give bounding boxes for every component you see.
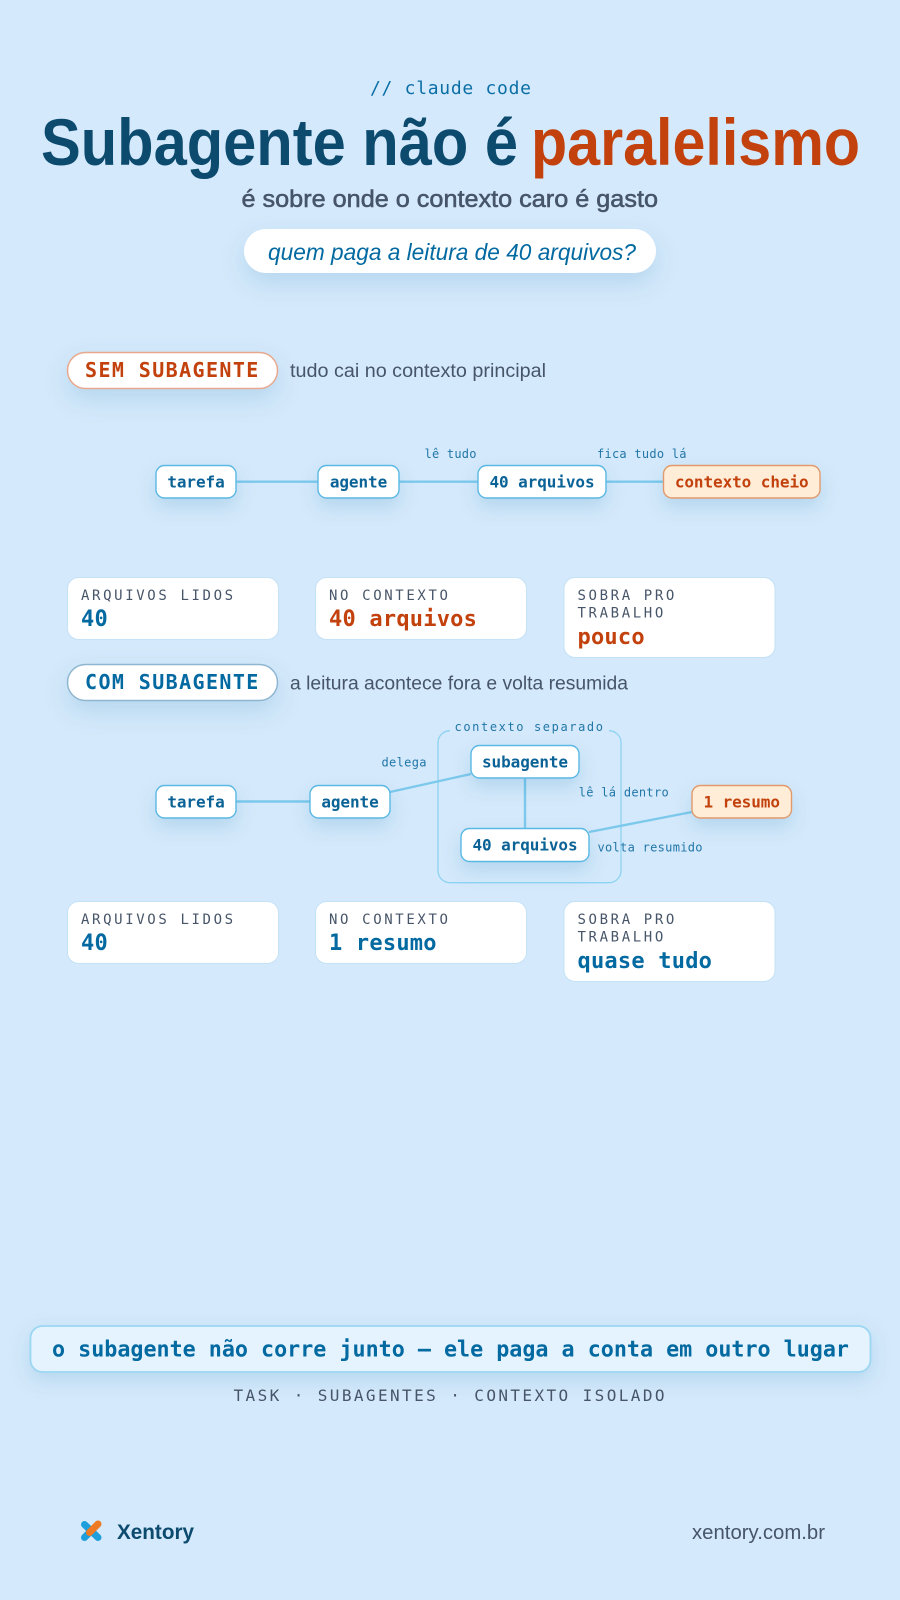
stat: sobra pro trabalho: pouco <box>578 625 645 650</box>
edge label: lê lá dentro: lê lá dentro <box>579 786 669 800</box>
diagram: sem subagente <box>156 447 820 498</box>
node: 40 arquivos: 40 arquivos <box>489 472 595 492</box>
eyebrow: // claude code <box>370 78 531 99</box>
stat: sobra pro trabalho: quase tudo <box>578 949 712 974</box>
footer logo <box>84 1521 194 1544</box>
node: agente: agente <box>321 792 379 812</box>
section tag: sem subagente <box>68 352 278 388</box>
node: contexto cheio: contexto cheio <box>675 472 809 492</box>
node: tarefa <box>156 466 236 498</box>
container: contexto separado: contexto separado <box>454 720 603 734</box>
connector lines <box>236 774 692 832</box>
question pill <box>244 229 656 273</box>
stat: no contexto: 40 arquivos <box>329 607 477 632</box>
edge label: delega: delega <box>382 756 426 770</box>
stat: no contexto: NO CONTEXTO <box>329 912 451 928</box>
node: contexto cheio <box>664 466 820 498</box>
stat: arquivos lidos <box>68 578 278 640</box>
node: agente <box>318 466 399 498</box>
node: tarefa <box>156 786 236 818</box>
callout <box>30 1326 870 1372</box>
node: subagente <box>471 746 579 778</box>
edge label: fica tudo lá: fica tudo lá <box>597 447 686 461</box>
node: 40 arquivos <box>478 466 606 498</box>
callout: o subagente não corre junto — ele paga a conta em outro lugar <box>52 1338 849 1362</box>
stats: sem subagente <box>68 578 775 658</box>
node: 40 arquivos: 40 arquivos <box>472 836 578 854</box>
stat: no contexto <box>316 902 526 964</box>
stat: arquivos lidos: 40 <box>81 931 108 956</box>
node: 1 resumo: 1 resumo <box>703 792 780 812</box>
stat: no contexto: 1 resumo <box>329 931 437 956</box>
footer url: xentory.com.br <box>692 1522 825 1544</box>
stat: arquivos lidos: ARQUIVOS LIDOS <box>81 912 236 928</box>
stat: arquivos lidos: ARQUIVOS LIDOS <box>81 588 236 604</box>
edge label: volta resumido: volta resumido <box>598 840 702 854</box>
title <box>41 105 860 179</box>
footer logo: Xentory <box>117 1521 194 1544</box>
node: 40 arquivos <box>461 828 589 862</box>
node: agente: agente <box>330 472 387 492</box>
section tag: com subagente: COM SUBAGENTE <box>85 670 260 694</box>
stat: sobra pro trabalho <box>564 578 775 658</box>
stat: sobra pro trabalho: SOBRA PRO <box>578 912 677 928</box>
section description: sem subagente: tudo cai no contexto principal <box>290 361 546 382</box>
section tag: sem subagente: SEM SUBAGENTE <box>85 358 260 382</box>
node: subagente: subagente <box>482 752 568 772</box>
stat: sobra pro trabalho <box>564 902 775 982</box>
node: tarefa: tarefa <box>167 472 225 492</box>
subtitle: é sobre onde o contexto caro é gasto <box>242 186 658 213</box>
node: tarefa: tarefa <box>167 792 225 812</box>
question pill: quem paga a leitura de 40 arquivos? <box>268 239 636 265</box>
connector lines <box>236 481 664 483</box>
title: paralelismo <box>531 105 860 179</box>
node: agente <box>310 786 390 818</box>
container: contexto separado <box>438 720 621 883</box>
section description: com subagente: a leitura acontece fora e volta resumida <box>290 674 628 694</box>
stat: sobra pro trabalho: TRABALHO <box>578 606 666 622</box>
node: 1 resumo <box>692 786 792 818</box>
stat: arquivos lidos <box>68 902 278 964</box>
stat: no contexto: NO CONTEXTO <box>329 588 451 604</box>
stat: sobra pro trabalho: TRABALHO <box>578 930 666 946</box>
icon: xentory mark <box>84 1524 98 1538</box>
section tag: com subagente <box>68 664 278 700</box>
diagram: com subagente <box>156 720 792 883</box>
title: Subagente não é <box>41 105 518 179</box>
stat: sobra pro trabalho: SOBRA PRO <box>578 588 677 604</box>
stat: arquivos lidos: 40 <box>81 607 108 632</box>
caption: TASK · SUBAGENTES · CONTEXTO ISOLADO <box>234 1386 664 1405</box>
stats: com subagente <box>68 902 775 982</box>
edge label: lê tudo: lê tudo <box>424 447 476 461</box>
stat: no contexto <box>316 578 526 640</box>
